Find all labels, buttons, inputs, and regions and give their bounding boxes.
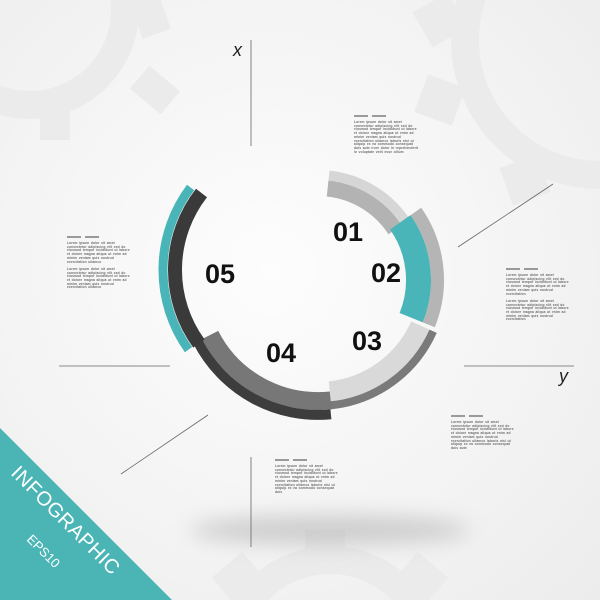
banner subtitle: EPS10 (24, 532, 63, 571)
number 05: 05 (205, 259, 235, 289)
text block: left: Lorem ipsum dolor sit amet consectetur adipiscing elit sed do eiusmod tempor incididunt ut labore et dolore magna aliqua ut enim ad minim veniam quis nostrud exercitation ullamco (67, 267, 130, 289)
shadow (190, 515, 470, 545)
label: y axis: y (559, 366, 568, 386)
segment 03 (330, 326, 433, 405)
number 03: 03 (352, 326, 382, 356)
text block: bottom right: Lorem ipsum dolor sit amet consectetur adipiscing elit sed do eiusmod tempor incididunt ut labore et dolore magna aliqua ut enim ad minim veniam quis nostrud exercitation ullamco laboris nisi ut aliquip ex ea commodo consequat duis aute (451, 420, 514, 450)
segment 04 (198, 335, 331, 415)
segment 02 (400, 212, 438, 325)
text block: left (67, 236, 130, 289)
text block: left: Lorem ipsum dolor sit amet consectetur adipiscing elit sed do eiusmod tempor incididunt ut labore et dolore magna aliqua ut enim ad minim veniam quis nostrud exercitation ullamco (67, 241, 130, 264)
text block: right: Lorem ipsum dolor sit amet consectetur adipiscing elit sed do eiusmod tempor incididunt ut labore et dolore magna aliqua ut enim ad minim veniam quis nostrud exercitation (506, 273, 569, 296)
text block: top: Lorem ipsum dolor sit amet consectetur adipiscing elit sed do eiusmod tempor incididunt ut labore et dolore magna aliqua ut enim ad minim veniam quis nostrud exercitation ullamco laboris nisi ut aliquip ex ea commodo consequat duis aute irure dolor in reprehenderit in voluptate velit esse cillum (354, 120, 418, 154)
number 04: 04 (266, 338, 296, 368)
number 01: 01 (333, 217, 363, 247)
text block: right (506, 268, 569, 321)
segment 05 (163, 188, 202, 350)
label: x axis: x (233, 40, 242, 60)
banner title: INFOGRAPHIC (6, 462, 124, 580)
text block: right: Lorem ipsum dolor sit amet consectetur adipiscing elit sed do eiusmod tempor incididunt ut labore et dolore magna aliqua ut enim ad minim veniam quis nostrud exercitation (506, 299, 569, 321)
segment 01 (328, 176, 406, 230)
text block: bottom: Lorem ipsum dolor sit amet consectetur adipiscing elit sed do eiusmod tempor incididunt ut labore et dolore magna aliqua ut enim ad minim veniam quis nostrud exercitation ullamco laboris nisi ut aliquip ex ea commodo consequat duis (275, 464, 338, 494)
number 02: 02 (371, 258, 401, 288)
